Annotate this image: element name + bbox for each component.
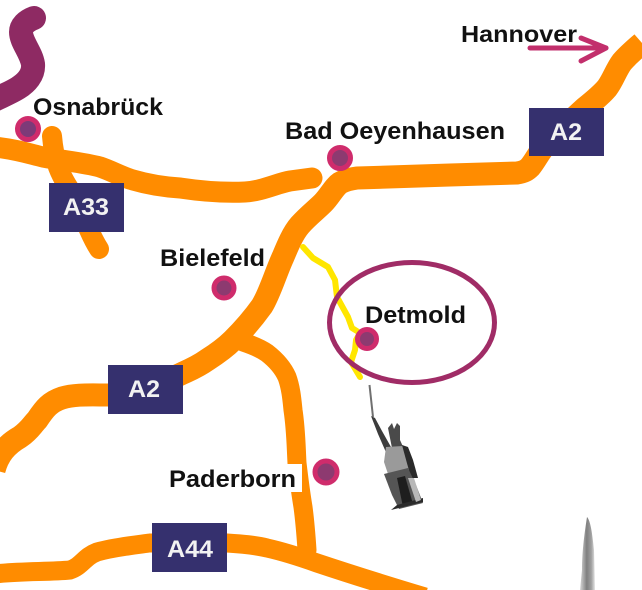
road sign: A2 south-west: A2 xyxy=(128,376,160,403)
road: A33 east-west xyxy=(0,147,312,192)
city marker: Detmold xyxy=(358,330,376,348)
city marker: Osnabrück xyxy=(18,118,38,140)
road sign: A33: A33 xyxy=(63,194,109,221)
road: A2 main motorway xyxy=(0,43,642,470)
label: Paderborn: Paderborn xyxy=(169,466,296,493)
icon: distant monument spire xyxy=(580,517,595,590)
Detmold region ellipse xyxy=(330,262,494,382)
road sign: A2 south-west xyxy=(108,365,183,414)
label: Osnabrück: Osnabrück xyxy=(33,94,164,121)
road: purple motorway xyxy=(0,18,34,101)
road sign: A44 xyxy=(152,523,227,572)
road sign: A33 xyxy=(49,183,124,232)
road sign: A2 north-east: A2 xyxy=(550,119,582,146)
city marker: Bielefeld xyxy=(214,278,234,298)
road: Paderborn link xyxy=(243,342,307,550)
label: Bielefeld: Bielefeld xyxy=(160,245,265,272)
yellow route to Detmold xyxy=(303,247,360,377)
city marker: Bad Oeyenhausen xyxy=(330,148,350,168)
arrow: to Hannover xyxy=(530,38,606,61)
icon: Hermann monument statue xyxy=(370,385,423,510)
label: Bad Oeyenhausen: Bad Oeyenhausen xyxy=(285,118,505,145)
city marker: Paderborn xyxy=(315,461,337,483)
label: Detmold: Detmold xyxy=(365,302,466,329)
road: A33 branch south xyxy=(52,136,99,249)
road sign: A44: A44 xyxy=(167,536,214,563)
road sign: A2 north-east xyxy=(529,108,604,156)
road: A44 xyxy=(0,543,425,590)
label: Hannover: Hannover xyxy=(461,21,577,47)
